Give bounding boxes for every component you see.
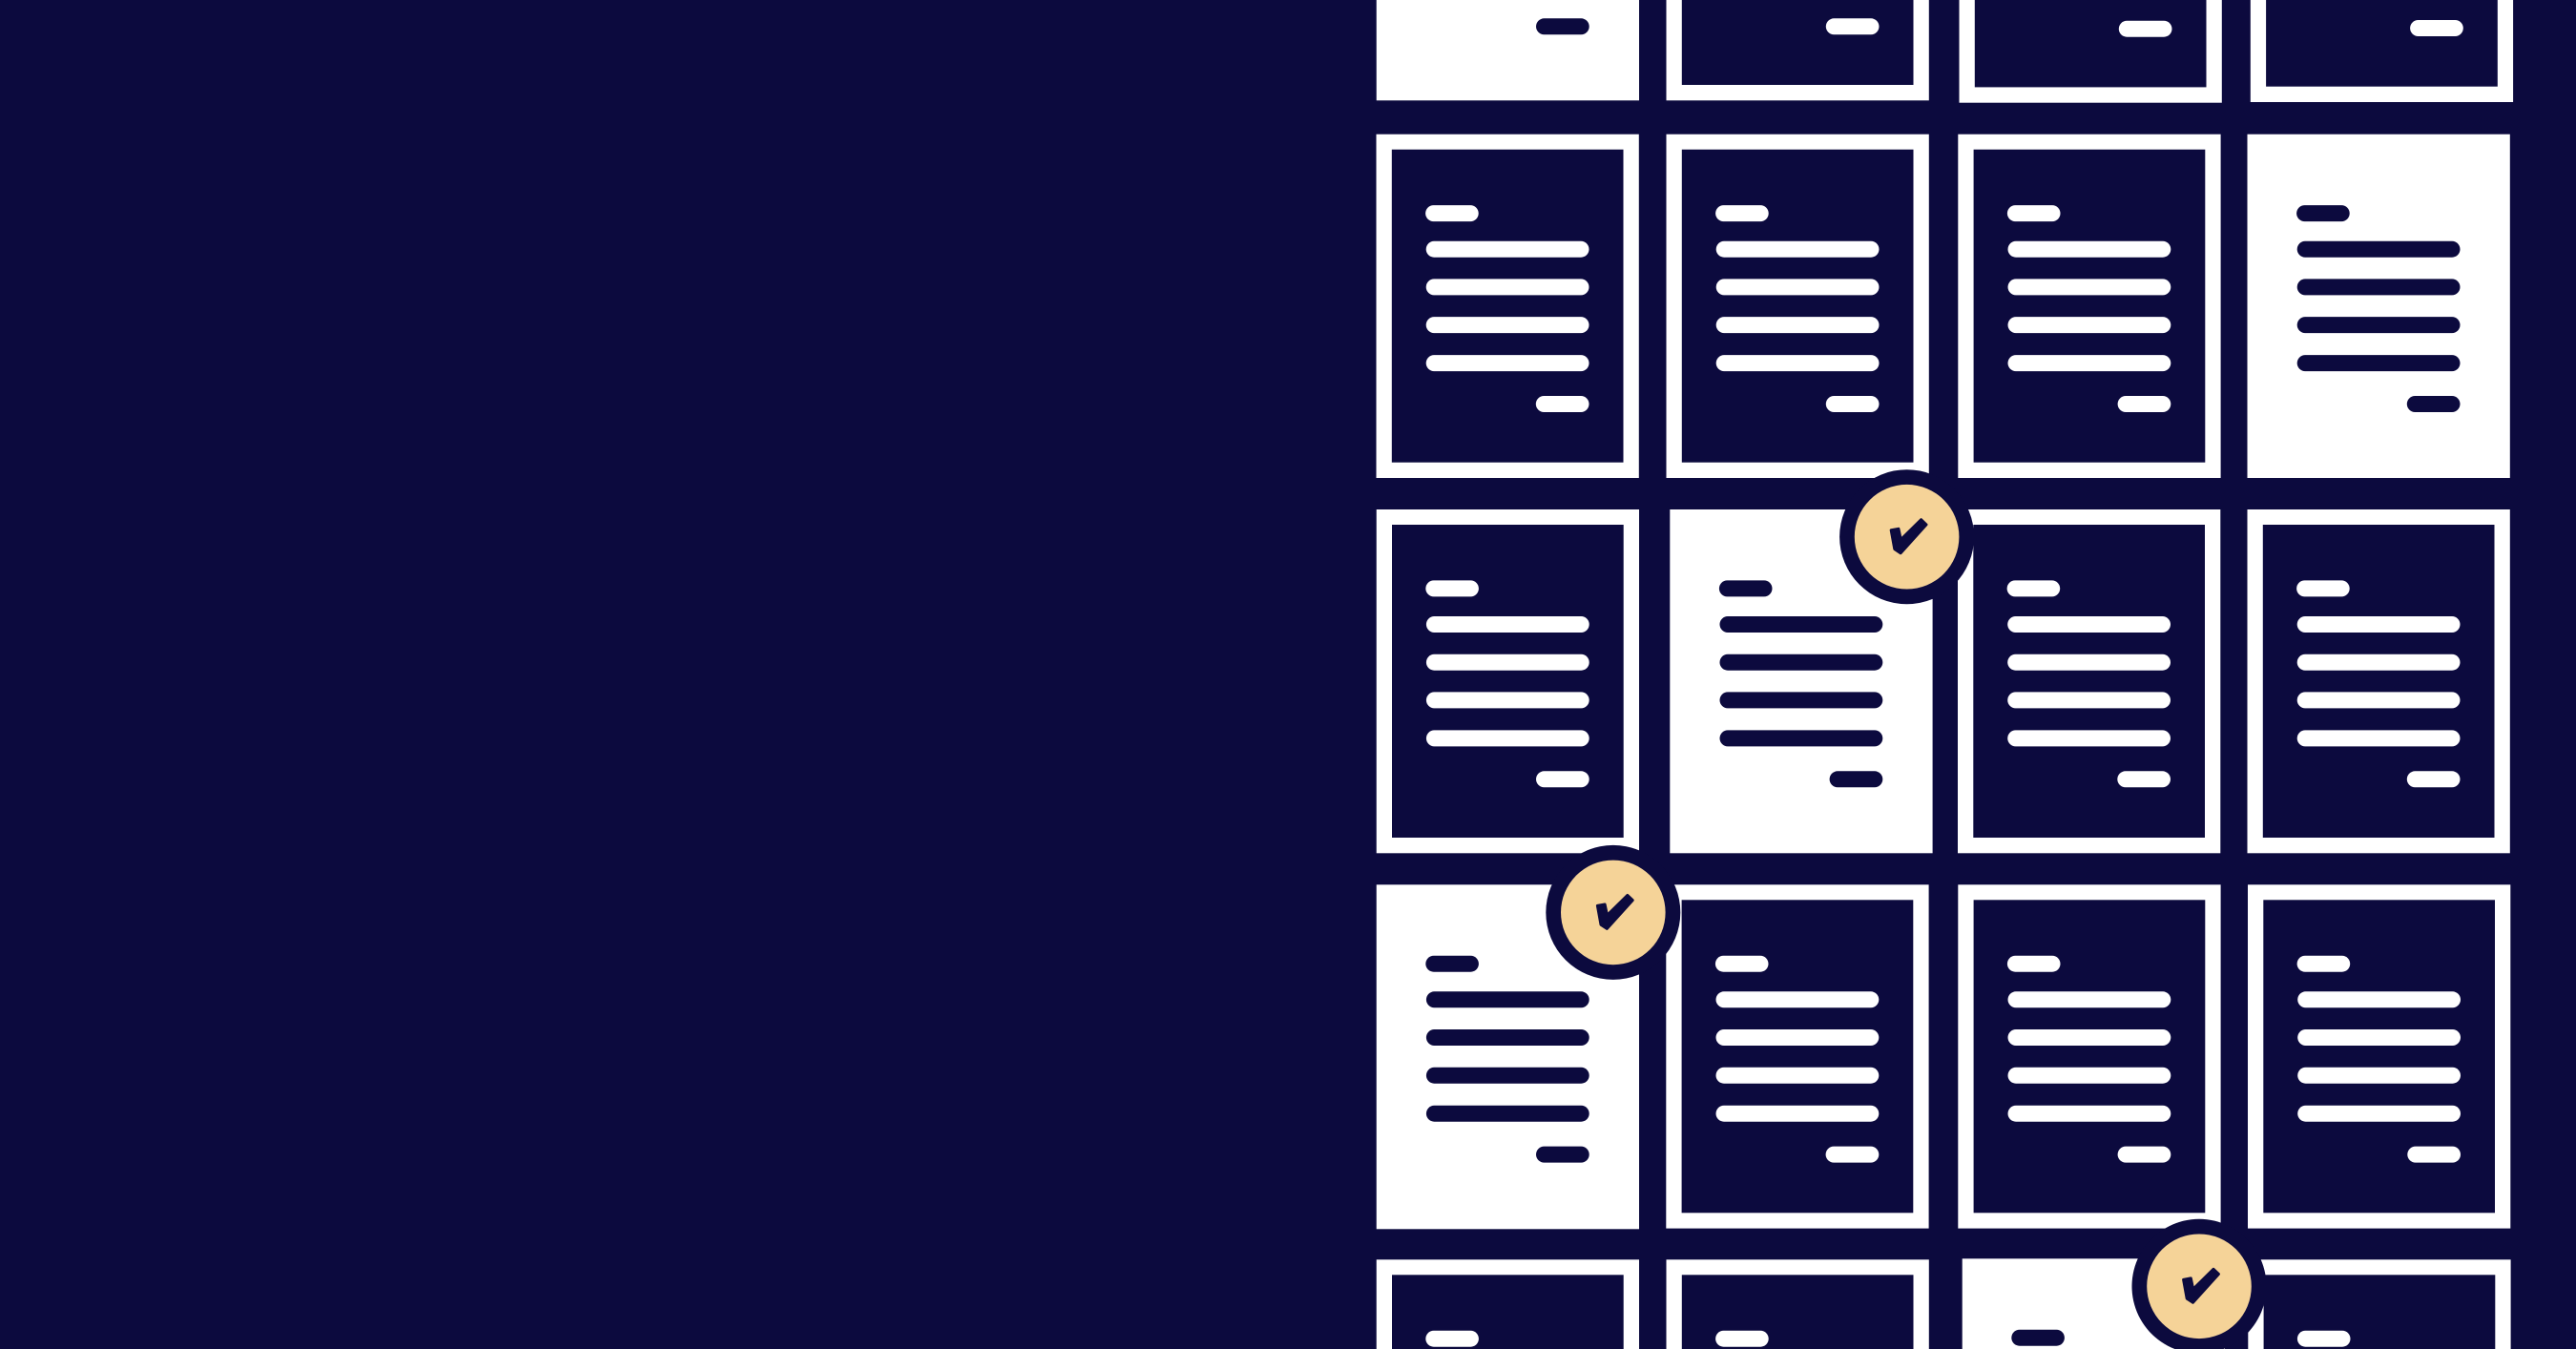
document row 2 column 3 bbox=[1958, 509, 2220, 853]
document row 3 column 3 bbox=[1958, 884, 2221, 1229]
check badge on row 4 column 3 bbox=[2131, 1219, 2267, 1349]
document row 3 column 2 bbox=[1666, 884, 1929, 1229]
highlighted document row 3 column 1 bbox=[1377, 884, 1639, 1229]
document row 3 column 4 bbox=[2248, 884, 2510, 1229]
highlighted document row 0 column 1 bbox=[1377, 0, 1639, 100]
check badge on row 3 column 1 bbox=[1546, 845, 1680, 980]
document row 0 column 4 bbox=[2251, 0, 2513, 102]
document row 1 column 1 bbox=[1376, 135, 1639, 478]
document row 4 column 2 bbox=[1666, 1259, 1929, 1349]
highlighted document row 4 column 3 bbox=[1963, 1258, 2225, 1349]
document row 0 column 3 bbox=[1960, 0, 2222, 103]
document row 0 column 2 bbox=[1666, 0, 1929, 100]
document row 4 column 1 bbox=[1377, 1259, 1639, 1349]
check badge on row 2 column 2 bbox=[1839, 469, 1974, 604]
document row 4 column 4 bbox=[2248, 1259, 2511, 1349]
document row 1 column 2 bbox=[1666, 135, 1929, 478]
highlighted document row 2 column 2 bbox=[1670, 509, 1933, 853]
document row 2 column 4 bbox=[2248, 509, 2510, 853]
document row 1 column 3 bbox=[1958, 135, 2221, 478]
highlighted document row 1 column 4 bbox=[2248, 135, 2510, 478]
document row 2 column 1 bbox=[1377, 509, 1639, 853]
